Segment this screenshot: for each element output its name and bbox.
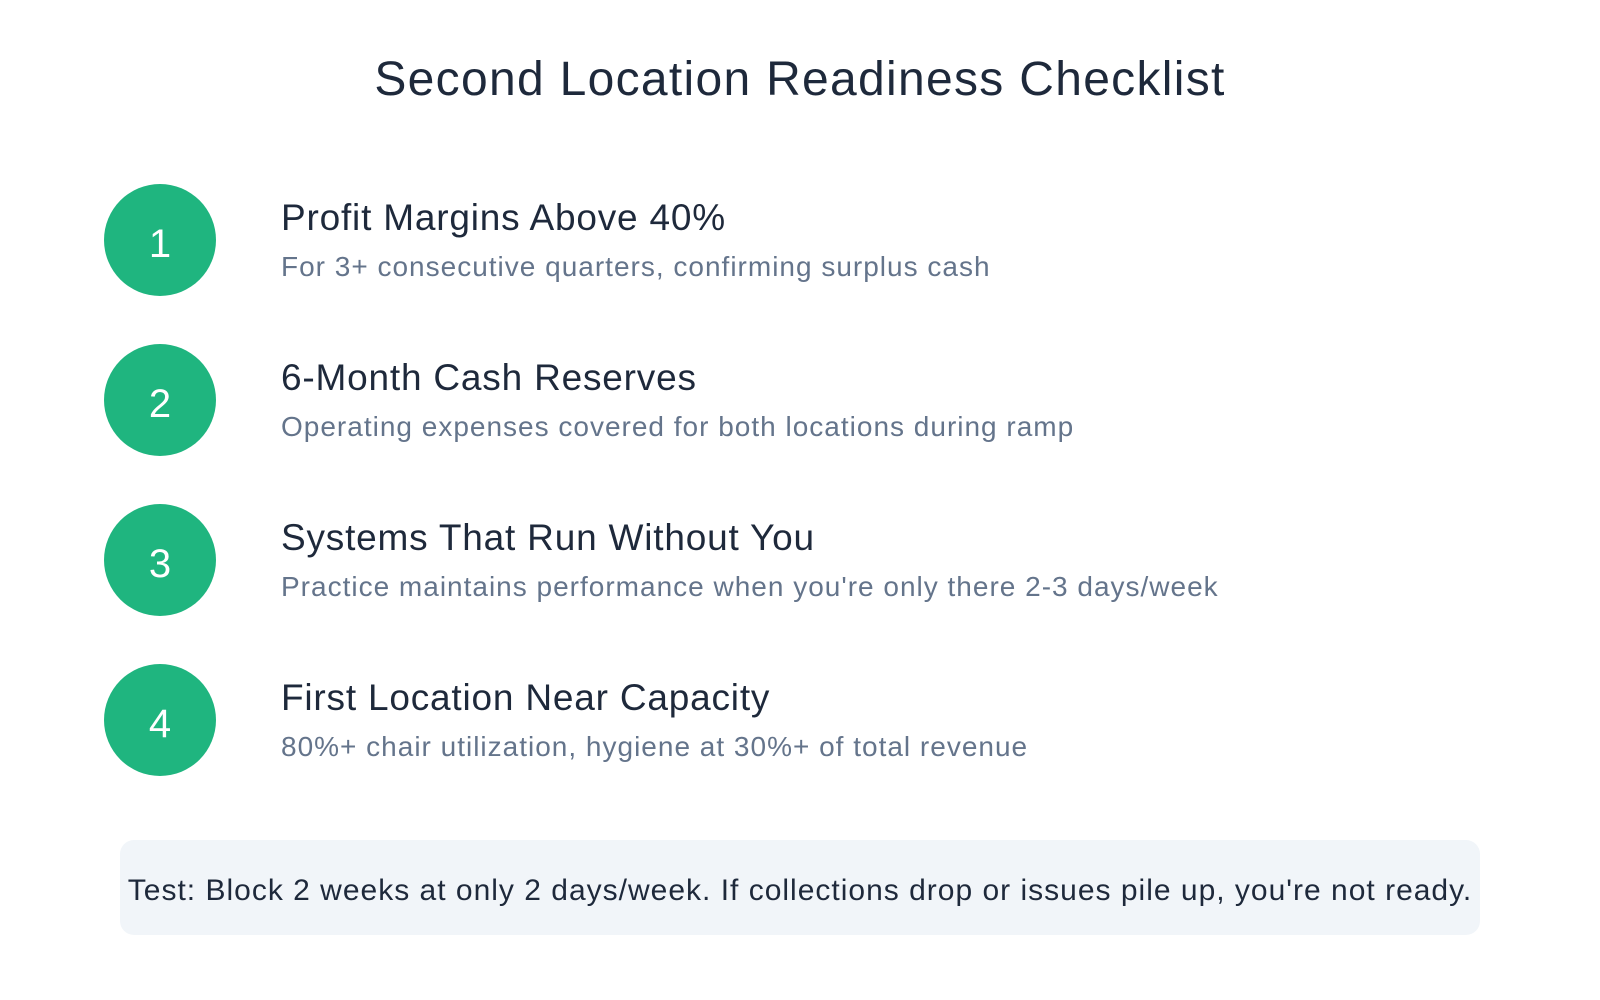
- heading 3: Systems That Run Without You: [281, 517, 815, 558]
- item 1: [104, 184, 991, 296]
- item 2: [104, 344, 1074, 456]
- callout: [120, 840, 1480, 935]
- icon: circle 2: 2: [149, 382, 171, 426]
- title: Second Location Readiness Checklist: [374, 53, 1226, 106]
- description 3: Practice maintains performance when you're only there 2-3 days/week: [281, 571, 1219, 602]
- icon: circle 3: [104, 504, 216, 616]
- heading 2: 6-Month Cash Reserves: [281, 357, 697, 398]
- item 3: [104, 504, 1219, 616]
- icon: circle 4: [104, 664, 216, 776]
- callout: Test: Block 2 weeks at only 2 days/week. If collections drop or issues pile up, you're not ready.: [128, 874, 1472, 907]
- icon: circle 1: 1: [149, 222, 171, 266]
- description 2: Operating expenses covered for both locations during ramp: [281, 411, 1074, 442]
- item 4: [104, 664, 1028, 776]
- heading 4: First Location Near Capacity: [281, 677, 770, 718]
- icon: circle 1: [104, 184, 216, 296]
- icon: circle 2: [104, 344, 216, 456]
- description 1: For 3+ consecutive quarters, confirming surplus cash: [281, 251, 991, 282]
- description 4: 80%+ chair utilization, hygiene at 30%+ of total revenue: [281, 731, 1028, 762]
- heading 1: Profit Margins Above 40%: [281, 197, 726, 238]
- icon: circle 4: 4: [149, 702, 171, 746]
- icon: circle 3: 3: [149, 542, 171, 586]
